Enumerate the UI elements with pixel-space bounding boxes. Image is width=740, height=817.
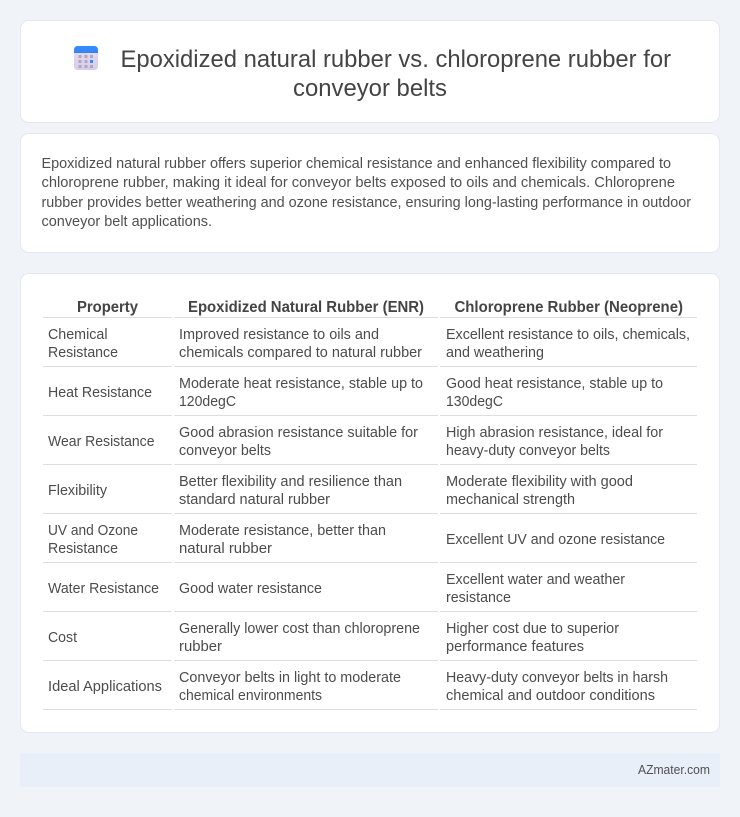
summary text: Epoxidized natural rubber offers superior chemical resistance and enhanced flexibility compared to [42, 156, 671, 172]
footer credit: AZmater.com [638, 762, 710, 777]
row: heat resistance: Moderate heat resistance, stable up to [179, 376, 423, 392]
row: water resistance: resistance [446, 590, 511, 606]
summary text: conveyor belt applications. [42, 214, 212, 230]
row: chemical resistance: chemicals compared to natural rubber [179, 345, 422, 361]
row: ideal applications: Ideal Applications [48, 679, 162, 695]
row: water resistance: Good water resistance [179, 581, 322, 597]
row: uv and ozone resistance [43, 523, 697, 563]
summary panel [20, 134, 720, 252]
row: ideal applications: Conveyor belts in light to moderate [179, 670, 401, 686]
row: heat resistance: Good heat resistance, stable up to [446, 376, 663, 392]
title: conveyor belts [293, 75, 447, 102]
row: uv and ozone resistance: Moderate resistance, better than [179, 523, 386, 539]
row: flexibility: Better flexibility and resilience than [179, 474, 402, 490]
row: cost: Higher cost due to superior [446, 621, 619, 637]
row: wear resistance: conveyor belts [179, 443, 271, 459]
title [120, 46, 671, 102]
row: wear resistance: High abrasion resistance, ideal for [446, 425, 663, 441]
title: Epoxidized natural rubber vs. chloroprene rubber for [120, 46, 671, 73]
row: heat resistance [43, 376, 697, 416]
row: cost: rubber [179, 639, 222, 655]
row: uv and ozone resistance: natural rubber [179, 541, 272, 557]
row: water resistance: Water Resistance [48, 581, 159, 597]
row: cost: Generally lower cost than chloroprene [179, 621, 420, 637]
row: flexibility: Flexibility [48, 483, 108, 499]
row: flexibility: Moderate flexibility with good [446, 474, 633, 490]
row: flexibility: mechanical strength [446, 492, 575, 508]
row: chemical resistance: Resistance [48, 345, 118, 361]
row: heat resistance: 120degC [179, 394, 236, 410]
row: wear resistance [43, 425, 697, 465]
summary text [42, 156, 691, 230]
footer bar [20, 753, 720, 787]
row: chemical resistance: Chemical [48, 327, 108, 343]
row: wear resistance: heavy-duty conveyor belts [446, 443, 610, 459]
row: ideal applications: Heavy-duty conveyor belts in harsh [446, 670, 668, 686]
row: chemical resistance: Improved resistance to oils and [179, 327, 379, 343]
row: heat resistance: Heat Resistance [48, 385, 152, 401]
row: water resistance: Excellent water and weather [446, 572, 625, 588]
row: wear resistance: Wear Resistance [48, 434, 154, 450]
comparison table panel [20, 274, 720, 732]
row: chemical resistance [43, 327, 697, 367]
table header row: Property [77, 299, 138, 316]
row: flexibility [43, 474, 697, 514]
row: uv and ozone resistance: Resistance [48, 541, 118, 557]
row: water resistance [43, 572, 697, 612]
row: wear resistance: Good abrasion resistance suitable for [179, 425, 418, 441]
table header row: Epoxidized Natural Rubber (ENR) [188, 299, 424, 316]
row: ideal applications: chemical and outdoor conditions [446, 688, 655, 704]
row: flexibility: standard natural rubber [179, 492, 330, 508]
table header row [43, 299, 697, 318]
row: cost [43, 621, 697, 661]
summary text: rubber provides better weathering and ozone resistance, ensuring long-lasting performance in outdoor [42, 195, 691, 211]
row: uv and ozone resistance: Excellent UV and ozone resistance [446, 532, 665, 548]
icon: calendar [74, 46, 98, 70]
row: uv and ozone resistance: UV and Ozone [48, 523, 138, 539]
row: heat resistance: 130degC [446, 394, 503, 410]
row: ideal applications [43, 670, 697, 710]
row: chemical resistance: and weathering [446, 345, 544, 361]
table header row: Chloroprene Rubber (Neoprene) [454, 299, 683, 316]
row: ideal applications: chemical environments [179, 688, 322, 704]
header panel [20, 20, 720, 122]
row: chemical resistance: Excellent resistance to oils, chemicals, [446, 327, 690, 343]
row: cost: performance features [446, 639, 584, 655]
summary text: chloroprene rubber, making it ideal for conveyor belts exposed to oils and chemicals. Chloroprene [42, 175, 675, 191]
row: cost: Cost [48, 630, 77, 646]
